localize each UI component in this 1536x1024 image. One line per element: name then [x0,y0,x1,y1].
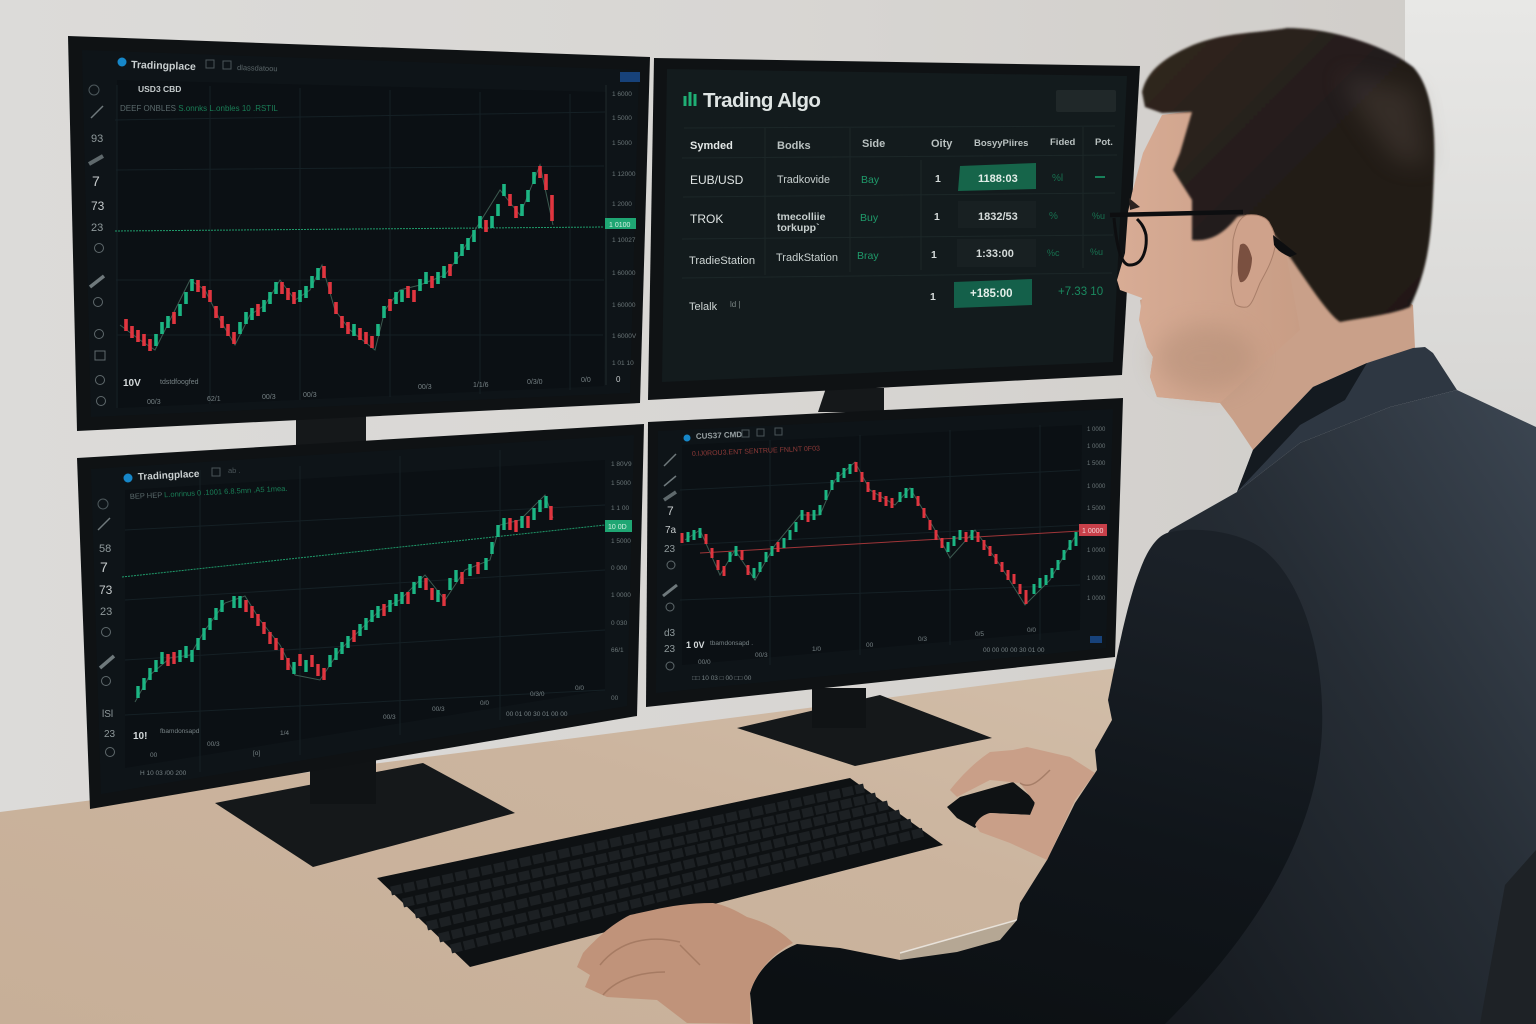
tool icons [663,454,677,670]
right price axis: 1 0000 [1087,484,1106,490]
tool icons: 23 [91,222,103,234]
volume and time axis: [o] [253,750,260,757]
symbol label: USD3 CBD [138,84,181,94]
volume and time axis: 00/3 [147,399,161,406]
tool icons: 7 [100,559,108,575]
row: TradieStation: TradkStation [776,252,838,264]
monitor: top right trading table [648,58,1140,400]
chart grid [115,85,605,408]
last price tag: 1 0000 [1082,528,1104,535]
volume and time axis: 00/3 [207,741,220,748]
last price tag: 10 0D [608,524,627,531]
right price axis: 1 5000 [611,538,631,545]
indicator legend: 0.IJ0ROU3.ENT SENTRUE FNLNT 0F03 [692,445,820,458]
row: TradieStation: %c [1047,248,1060,258]
candlestick chart [135,495,553,702]
row: TROK: 1 [934,211,940,223]
right price axis: 1 0000 [1087,576,1106,582]
tool icons: 23 [104,729,116,740]
volume and time axis: 00 [866,642,874,649]
row: EUB/USD [690,163,1105,191]
last price tag [605,520,632,532]
tool icons: 23 [664,644,676,655]
row: TROK: torkupp` [777,222,820,234]
volume and time axis: 0/3/0 [527,379,543,386]
right price axis [606,85,637,385]
volume and time axis: 10V [123,378,141,389]
candlestick chart [682,462,1077,605]
row: TROK: tmecolliie [777,211,826,223]
row: Telalk total: +185:00 [970,288,1013,300]
desk [0,668,1200,1024]
finger creases [600,939,700,995]
face [1117,110,1300,403]
last price tag [605,218,636,229]
row: TROK [690,201,1105,234]
volume and time axis: 00/0 [698,659,711,666]
hand on keyboard [577,903,793,1024]
toolbar title [118,58,640,82]
glasses [1110,212,1297,265]
volume and time axis: 0 [616,375,621,384]
tool icons: 73 [99,583,113,597]
volume and time axis: 1 0V [686,640,705,650]
tool icons: 73 [91,199,105,213]
row: Telalk total [689,279,1103,313]
right price axis: 1 0000 [1087,444,1106,450]
monitor: bottom right [646,398,1123,707]
monitor: top left [68,36,650,431]
volume and time axis: 1/0 [812,646,821,653]
volume and time axis [133,685,584,777]
chart grid [125,450,605,772]
right price axis: 0 000 [611,565,628,572]
neck [1140,240,1415,450]
row: TradieStation: 1:33:00 [976,248,1014,260]
right price axis: 1 80V9 [611,461,632,468]
tool icons: lSl [102,709,113,720]
volume and time axis: 00 00 00 00 30 01 00 [983,647,1045,654]
right price axis: 1 12000 [612,171,636,178]
under-desk strip [900,920,1017,965]
right price axis: 1 5000 [611,480,631,487]
row: TROK: TROK [690,212,723,226]
row: Telalk total: ld | [730,300,741,309]
right price axis: 1 5000 [612,115,632,122]
row: EUB/USD: 1188:03 [978,173,1018,185]
row: Telalk total: Telalk [689,301,718,313]
sleeve [750,530,1322,1024]
tool icons: 7a [665,525,677,536]
toolbar title: Tradingplace [131,59,196,73]
tool icons: 93 [91,133,103,145]
price line [700,531,1080,553]
row: TradieStation: Bray [857,250,879,262]
chart grid [680,425,1080,665]
right price axis: 1 01 10 [612,360,634,367]
table header: Pot. [1095,137,1113,148]
volume and time axis: □□ 10 03 □ 00 □□ 00 [692,675,752,682]
hair highlight [1340,75,1428,165]
keyboard [377,778,943,967]
collar shadow [1237,363,1367,492]
right price axis: 1 60000 [612,302,636,309]
mouse [947,782,1035,828]
volume and time axis: 1/4 [280,730,289,737]
volume and time axis: 62/1 [207,396,221,403]
table header [690,137,1113,152]
row: TradieStation: %u [1090,247,1103,257]
tool icons [98,499,116,756]
volume and time axis: 00/3 [755,652,768,659]
row: Telalk total: +7.33 10 [1058,286,1103,298]
volume and time axis: 00 01 00 30 01 00 00 [506,711,568,718]
table header: Fided [1050,137,1076,148]
volume and time axis: 0/0 [480,700,489,707]
icon: green bars [685,92,695,106]
row: TradieStation [689,239,1103,267]
stubble shadow [1155,324,1255,392]
right price axis [1087,427,1106,602]
volume and time axis: 0/0 [581,377,591,384]
right price axis: 66/1 [611,647,624,654]
tool icons: 7 [667,504,674,518]
row: TradieStation: TradieStation [689,255,755,267]
toolbar title [124,466,241,483]
volume and time axis: 00 [150,752,158,759]
right price axis: 1 0000 [1087,427,1106,433]
tool icons: 7 [92,173,100,189]
row: TROK: % [1049,211,1058,222]
row: EUB/USD: Bay [861,174,880,186]
table header: Oity [931,138,953,150]
row: TROK: Buy [860,212,879,224]
table header: Bodks [777,140,811,152]
right price axis: 1 1 00 [611,505,629,512]
indicator legend: DEEF ONBLES S.onnks L.onbles 10 .RSTIL [120,104,278,113]
indicator legend: BEP HEP L.onrinus 0 .1001 6.8.5mn .A5 1mea. [130,484,288,501]
row: Telalk total: 1 [930,291,936,303]
volume and time axis: 0/0 [1027,627,1036,634]
table rules [682,126,1117,278]
last price tag: 1 0100 [609,222,631,229]
ear [1231,215,1275,307]
volume and time axis [123,375,621,406]
right price axis: 1 6000V [612,333,637,340]
volume and time axis: 00/3 [418,384,432,391]
row: EUB/USD: Tradkovide [777,174,830,186]
right price axis: 1 5000 [612,140,632,147]
eyebrow [1129,198,1140,210]
right price axis [611,461,632,702]
monitor: bottom left [77,424,644,809]
volume and time axis: 0/0 [575,685,584,692]
toolbar title: ab . [228,466,241,475]
monitor stand: bottom right [737,688,992,766]
table header: Symded [690,140,733,152]
volume and time axis: 10! [133,731,147,742]
toolbar title [684,428,782,442]
right price axis: 00 [611,695,619,702]
table header: Side [862,138,885,150]
row: TROK: 1832/53 [978,211,1018,223]
table header: BosyyPiires [974,138,1028,149]
row: TradieStation: 1 [931,249,937,261]
right price axis: 1 0000 [1087,596,1106,602]
chair back [1480,850,1536,1024]
hand on mouse [950,747,1095,860]
person [750,28,1536,1024]
volume and time axis: tbamdonsapd . [710,640,753,647]
right price axis: 1 5000 [1087,461,1106,467]
volume and time axis [686,627,1102,682]
volume and time axis: 00/3 [432,706,445,713]
volume and time axis: 0/3 [918,636,927,643]
back of jacket [1140,390,1536,1024]
volume and time axis: 00/3 [262,394,276,401]
hair [1142,28,1434,322]
volume and time axis: fbamdonsapd [160,728,200,735]
tool icons: 23 [100,606,112,618]
right price axis: 1 5000 [1087,506,1106,512]
row: EUB/USD: 1 [935,173,941,185]
toolbar title: CUS37 CMD [696,430,742,441]
right price axis: 1 6000 [612,91,632,98]
right price axis: 1 0000 [1087,548,1106,554]
right price axis: 0 030 [611,620,628,627]
volume and time axis: 0/5 [975,631,984,638]
heading: Trading Algo [703,89,820,112]
volume and time axis: H 10 03 /00 200 [140,770,187,777]
tool icons [89,85,106,406]
tool icons: 23 [664,544,676,555]
floor sliver [1157,997,1180,1024]
collar [1237,347,1457,492]
tool icons: d3 [664,628,676,639]
volume and time axis: 00/3 [383,714,396,721]
last price tag [1079,524,1107,536]
toolbar title: Tradingplace [138,469,200,483]
monitor stand: bottom left [215,758,515,867]
volume and time axis: 0/3/0 [530,691,545,698]
row: EUB/USD: EUB/USD [690,173,744,187]
price line [115,227,604,231]
search box [1056,90,1116,112]
right price axis: 1 10027 [612,237,636,244]
volume and time axis: tdstdfoogfed [160,379,199,386]
monitor stand: top right [818,388,884,412]
row: TROK: %u [1092,211,1105,221]
toolbar title: dlassdatoou [237,63,278,73]
row: EUB/USD: %l [1052,173,1063,184]
right price axis: 1 2000 [612,201,632,208]
finger crease [1020,770,1050,785]
volume and time axis: 1/1/6 [473,382,489,389]
price line [122,525,605,577]
monitor stand: top left [296,415,366,445]
candlestick chart [120,165,553,351]
tool icons: 58 [99,543,111,555]
right price axis: 1 0000 [611,592,631,599]
volume and time axis: 00/3 [303,392,317,399]
right price axis: 1 60000 [612,270,636,277]
